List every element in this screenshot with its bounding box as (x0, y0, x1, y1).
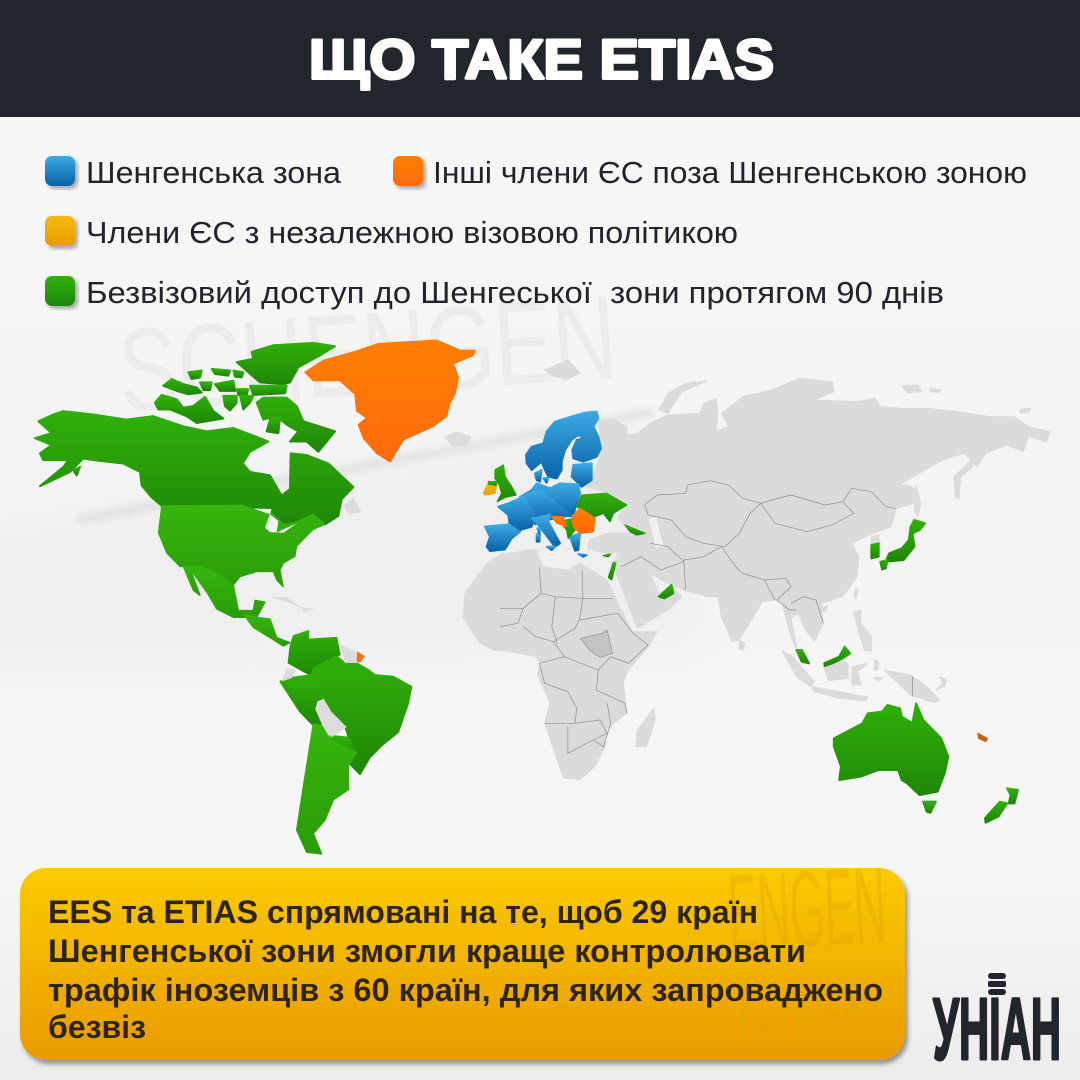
Great Lakes (253, 508, 297, 533)
Schengen countries (485, 412, 601, 557)
Canada and Alaska (35, 343, 353, 528)
legend: other EU label: Інші члени ЄС поза Шенгенською зоною (433, 155, 1027, 190)
legend: visa-free swatch (45, 276, 75, 306)
French Guiana (357, 651, 365, 663)
world map (35, 340, 1050, 854)
Greenland (305, 340, 475, 462)
UNIAN logo (933, 973, 1061, 1078)
legend: Schengen zone label: Шенгенська зона (86, 155, 342, 190)
South America (280, 631, 412, 774)
Mexico and Central America (183, 567, 290, 646)
background photo: Schengen sign (0, 272, 700, 660)
callout text: EES та ETIAS спрямовані на те, щоб 29 країн (48, 894, 758, 930)
Ireland (483, 485, 497, 495)
callout text: безвіз (48, 1009, 146, 1045)
callout text (48, 894, 883, 1045)
title: ЩО ТАКЕ ETIAS (309, 28, 774, 90)
header bar (0, 0, 1080, 117)
map: Eurasia, Africa and grey islands (463, 360, 1050, 779)
map: Europe (483, 412, 645, 557)
callout background ghost text (725, 844, 889, 1059)
callout text: Шенгенської зони змогли краще контролювати (48, 933, 806, 969)
legend: independent visa policy label: Члени ЄС з незалежною візовою політикою (86, 215, 738, 250)
legend: other EU swatch (393, 156, 423, 186)
Iceland (443, 431, 472, 447)
callout background ghost text: hengen (737, 979, 864, 1059)
visa-free Europe and Middle East (488, 465, 645, 557)
legend: visa-free label: Безвізовий доступ до Шенгеської зони протягом 90 днів (86, 275, 944, 310)
legend: Schengen zone swatch (45, 156, 75, 186)
Romania and Bulgaria (572, 508, 595, 533)
map: Asia-Pacific visa-free countries (609, 520, 1018, 823)
Croatia (552, 517, 567, 527)
legend (45, 155, 1027, 310)
USA (158, 505, 325, 587)
map: New Caledonia (978, 733, 987, 742)
map: Americas (35, 340, 475, 854)
callout text: трафік іноземців з 60 країн, для яких запроваджено (48, 972, 883, 1008)
grey Americas countries (272, 497, 362, 737)
map: grey country borders (500, 481, 912, 753)
logo microphone icon (988, 973, 1006, 995)
background photo: Schengen sign: SCHENGEN (115, 272, 621, 438)
map: South Sudan darker grey (580, 630, 612, 657)
callout box (20, 844, 905, 1060)
legend: independent visa policy swatch (45, 216, 75, 246)
